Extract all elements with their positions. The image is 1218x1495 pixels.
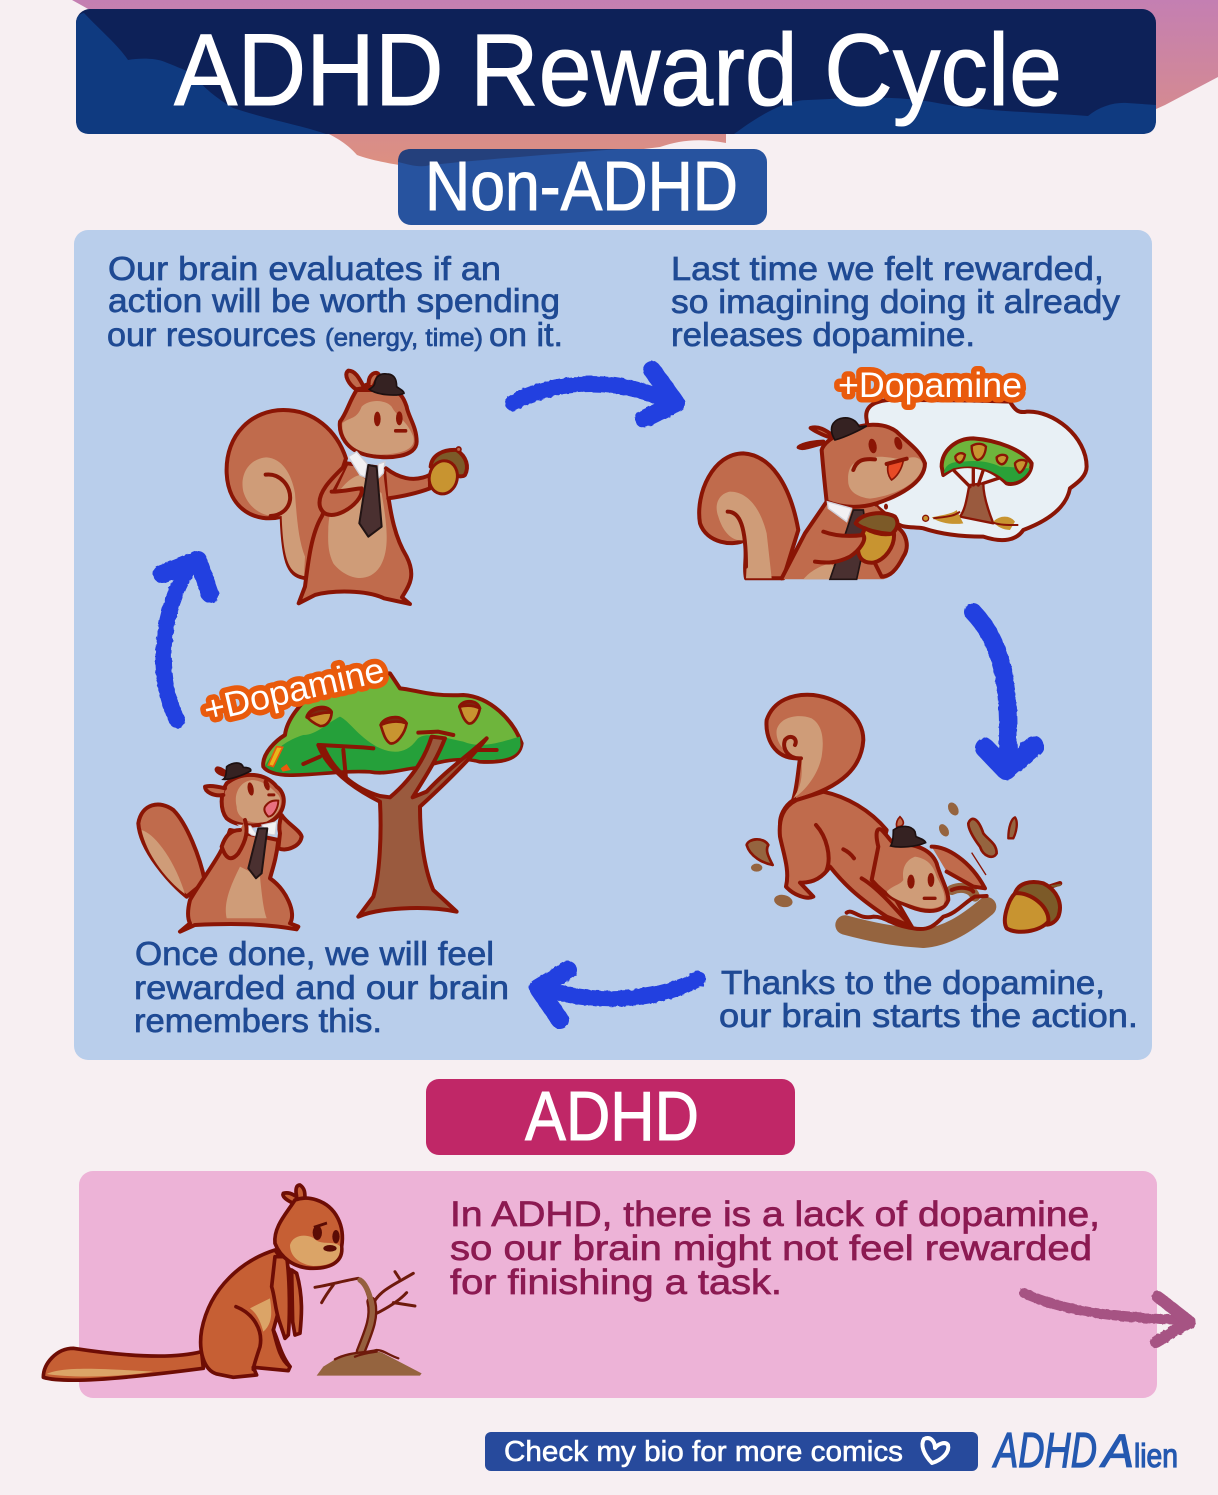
text: step 3 action (719, 964, 1138, 1034)
panel: non-ADHD cycle (74, 230, 1152, 1060)
ears (346, 371, 379, 389)
text: step 1 evaluates: on it. (489, 316, 563, 353)
small branches (303, 732, 497, 778)
text: step 1 evaluates: (energy, time) (325, 324, 483, 352)
illustration: squirrel digging (747, 695, 1060, 938)
arrow: step 4 to step 1 (162, 560, 210, 720)
text: ADHD explanation: for finishing a task. (450, 1263, 782, 1302)
canopy (263, 673, 522, 775)
hat (891, 826, 926, 847)
illustration: squirrel imagining tree (699, 400, 1087, 579)
text: step 1 evaluates: Our brain evaluates if an (108, 250, 501, 287)
hat (223, 763, 251, 779)
illustration: squirrel and acorn tree (138, 673, 522, 932)
title text: ADHD Reward Cycle (174, 13, 1062, 127)
text: step 3 action: our brain starts the action. (719, 997, 1138, 1034)
tail (766, 695, 863, 823)
text: step 2 imagining: so imagining doing it already (671, 283, 1121, 320)
collar and tie (238, 822, 277, 878)
hands and acorn (815, 504, 907, 577)
footer logo: ADHD Alien: lien (1134, 1437, 1178, 1474)
arms (319, 464, 362, 515)
illustration: sad squirrel and dead tree (43, 1185, 422, 1380)
footer logo: ADHD Alien: ADHD (992, 1424, 1097, 1478)
arrow: step 2 to step 3 (973, 612, 1034, 770)
text: step 4 rewarded: rewarded and our brain (134, 969, 509, 1006)
tree in bubble (923, 438, 1032, 530)
far arm (932, 847, 985, 888)
body (180, 830, 298, 932)
heading: Non-ADHD: Non-ADHD (425, 147, 738, 225)
text: ADHD explanation (450, 1195, 1100, 1302)
head (340, 390, 417, 457)
text: step 1 evaluates: action will be worth spending (108, 282, 560, 319)
acorn (1005, 882, 1060, 932)
arrow: next page (1024, 1293, 1190, 1342)
head (222, 775, 284, 825)
flying dirt (747, 801, 1017, 909)
ears (283, 1185, 305, 1203)
illustration: squirrel holding acorn (227, 371, 467, 604)
text: step 2 imagining: releases dopamine. (671, 316, 975, 353)
collar and tie (348, 452, 385, 537)
label: +Dopamine thought: +Dopamine (838, 366, 1022, 405)
text: ADHD explanation: In ADHD, there is a lack of dopamine, (450, 1195, 1100, 1234)
dirt mound (845, 888, 987, 938)
tail (43, 1348, 203, 1380)
tree trunk and branches (318, 737, 487, 917)
text: step 1 evaluates (107, 250, 563, 353)
face (374, 411, 407, 433)
text: step 2 imagining (671, 250, 1121, 353)
acorn (426, 447, 467, 497)
acorns (307, 701, 480, 743)
title banner (76, 9, 1156, 134)
text: step 3 action: Thanks to the dopamine, (721, 964, 1105, 1001)
head (872, 829, 948, 911)
eyes (867, 436, 904, 454)
text: ADHD explanation: so our brain might not feel rewarded (450, 1229, 1092, 1268)
head (822, 425, 925, 507)
arrow: step 3 to step 4 (538, 970, 698, 1020)
button text: Check my bio for more comics (504, 1436, 903, 1468)
ears (799, 427, 833, 448)
arrow: step 1 to step 2 (513, 370, 676, 419)
heading: ADHD (426, 1077, 795, 1155)
background sky shape (72, 0, 1218, 168)
tail (699, 453, 798, 578)
label: +Dopamine tree: +Dopamine (200, 650, 388, 730)
text: step 1 evaluates: our resources (107, 316, 316, 353)
panel: ADHD (43, 1171, 1157, 1398)
body (780, 792, 912, 927)
text: step 4 rewarded (134, 935, 509, 1039)
body (201, 1250, 290, 1377)
heading: ADHD: ADHD (525, 1077, 699, 1155)
hands (222, 815, 302, 858)
dead tree (315, 1272, 415, 1352)
hat (369, 374, 404, 395)
footer logo: ADHD Alien: A (1099, 1425, 1134, 1477)
thought bubble (866, 400, 1087, 540)
text: step 4 rewarded: Once done, we will feel (135, 935, 494, 972)
collar and tie (827, 502, 867, 579)
icon: heart (922, 1438, 948, 1463)
head (275, 1198, 342, 1268)
face (313, 1222, 340, 1252)
hat (832, 418, 867, 440)
mound (317, 1351, 422, 1376)
text: step 4 rewarded: remembers this. (134, 1002, 382, 1039)
body (782, 500, 907, 579)
tail (138, 805, 205, 897)
text: step 2 imagining: Last time we felt rewarded, (671, 250, 1104, 287)
arms (272, 1257, 289, 1338)
footer button (485, 1432, 978, 1471)
